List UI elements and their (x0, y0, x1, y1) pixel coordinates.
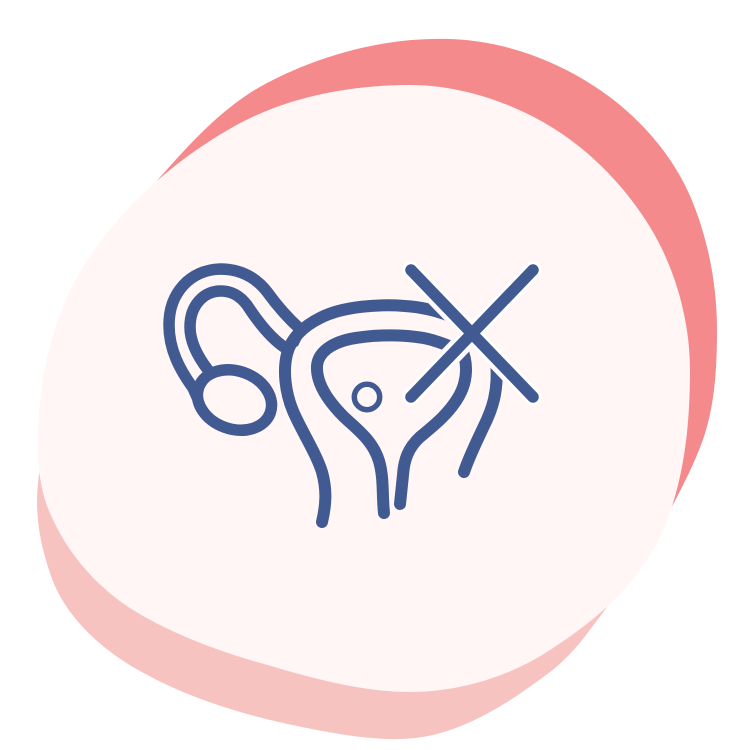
cross: cream cut-out (411, 270, 533, 397)
uterus: inner cavity left (317, 335, 458, 513)
ovary (189, 360, 280, 440)
icon: uterus (169, 269, 533, 522)
fallopian tube: inner line (190, 291, 284, 370)
uterus: inner cavity right (400, 347, 466, 504)
cervical circle (354, 384, 380, 410)
tube junction with uterus (286, 328, 306, 352)
tube junction with ovary (187, 367, 212, 400)
cross: blue strokes (411, 270, 533, 397)
blob: cream foreground (38, 85, 690, 692)
cross: white halo (411, 270, 533, 397)
fallopian tube: outer line (169, 269, 300, 397)
uterus: outer wall left (285, 305, 450, 522)
blob: salmon back layer (155, 39, 717, 510)
blob: light pink back layer (37, 400, 607, 739)
uterus: outer wall right (464, 360, 497, 472)
